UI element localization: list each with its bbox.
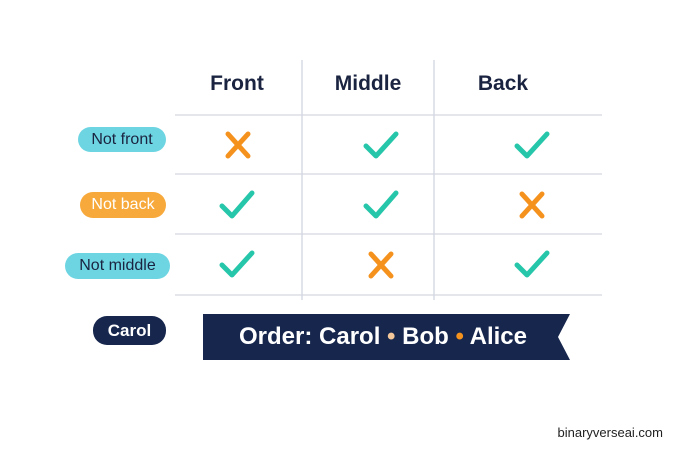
pill: Not middle	[65, 253, 170, 279]
header: Front: Front	[210, 72, 264, 95]
pill: Not front: Not front	[91, 131, 153, 148]
header: Back: Back	[478, 72, 528, 95]
header: Middle: Middle	[335, 72, 401, 95]
footer credit: binaryverseai.com	[558, 425, 663, 440]
pill: Carol	[93, 316, 166, 345]
pill: Not middle: Not middle	[79, 257, 156, 274]
marks	[222, 134, 547, 276]
pill: Not back	[80, 192, 166, 218]
pill: Not front	[78, 127, 166, 152]
pill: Not back: Not back	[91, 196, 155, 213]
pill: Carol: Carol	[108, 321, 151, 340]
banner text: Order: Carol • Bob • Alice	[239, 323, 527, 350]
banner	[203, 314, 570, 360]
